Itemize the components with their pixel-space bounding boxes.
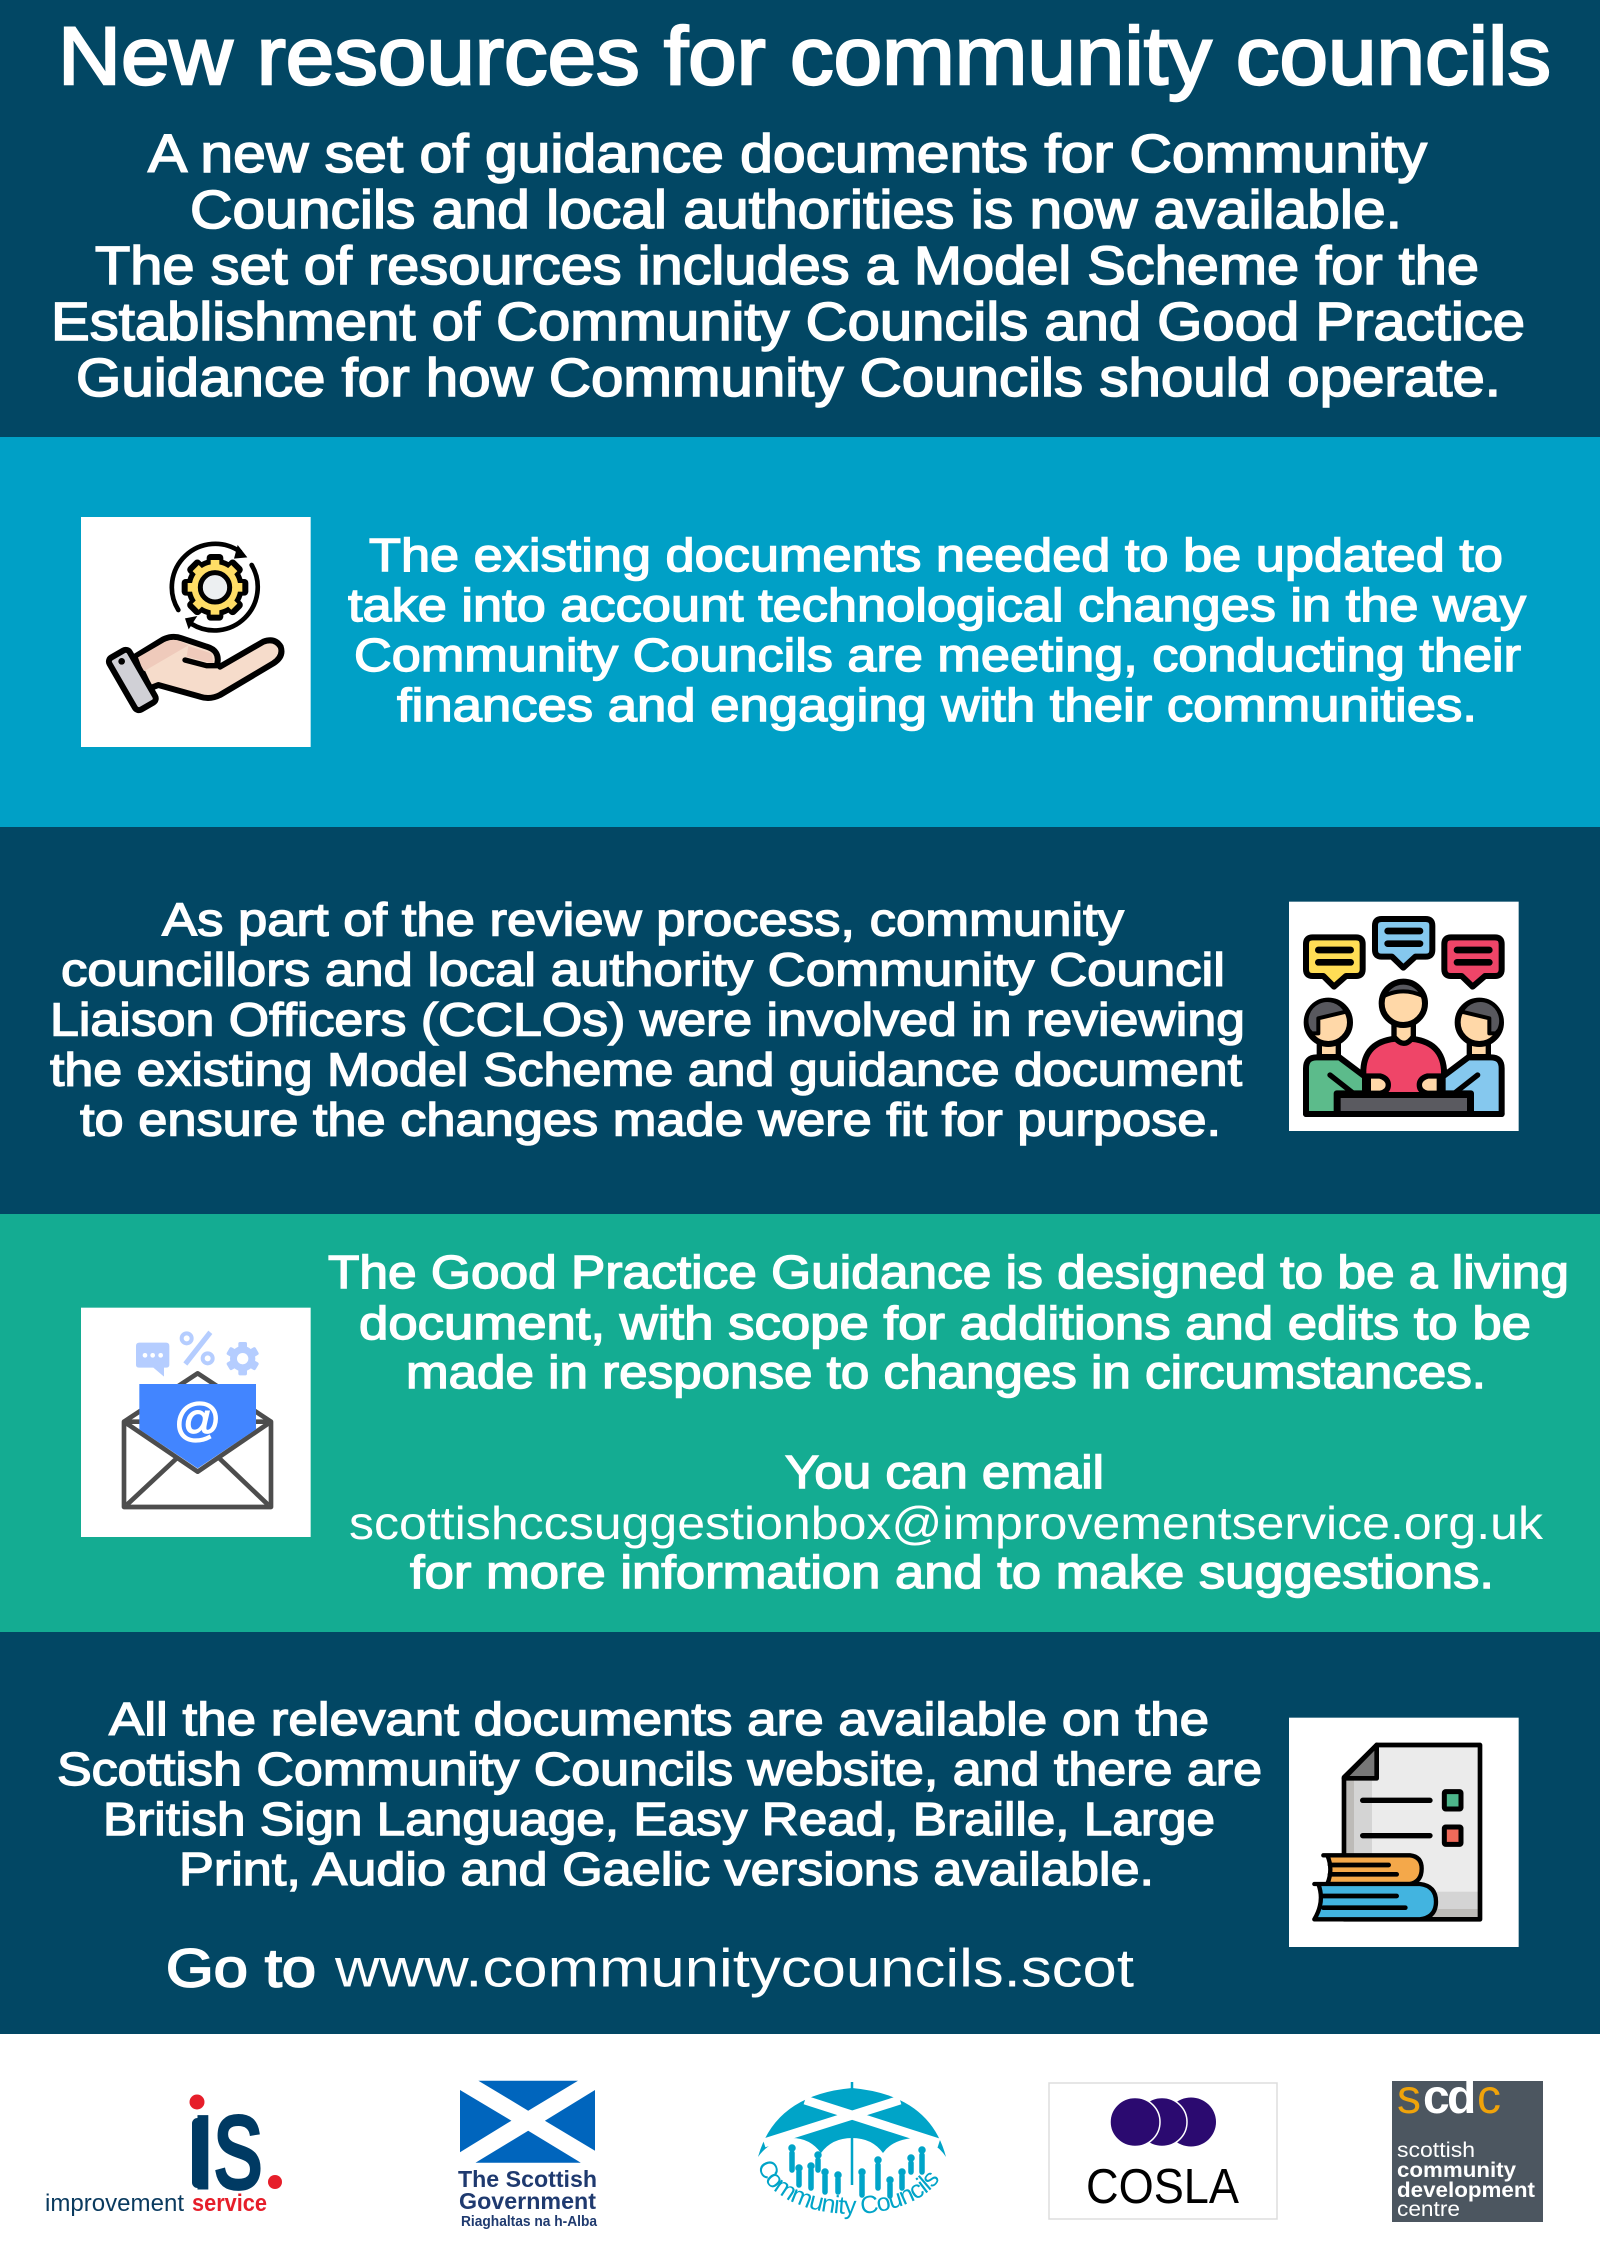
- logo: improvement service: is: [192, 2066, 263, 2217]
- intro text block: Guidance for how Community Councils should operate.: [76, 349, 1501, 408]
- website link: Go to: [166, 1938, 316, 1998]
- text block: why updated: [348, 529, 1527, 731]
- logo: the scottish government: Riaghaltas na h-Alba: [461, 2213, 598, 2230]
- logo: scottish community development centre: c: [1477, 2071, 1501, 2124]
- panel: partner logos: [45, 2066, 1543, 2230]
- text block: why updated: finances and engaging with their communities.: [397, 679, 1477, 731]
- text block: availability: Scottish Community Councils website, and there are: [57, 1743, 1262, 1795]
- title: New resources for community councils: [58, 11, 1551, 102]
- intro text block: Establishment of Community Councils and Good Practice: [51, 293, 1525, 352]
- text block: availability: All the relevant documents are available on the: [109, 1693, 1209, 1745]
- text block: review process: the existing Model Scheme and guidance document: [50, 1044, 1242, 1096]
- text block: living document: The Good Practice Guidance is designed to be a living: [328, 1246, 1569, 1298]
- text block: living document: [328, 1246, 1569, 1398]
- text block: review process: [50, 894, 1245, 1146]
- text block: living document: document, with scope for additions and edits to be: [359, 1297, 1531, 1349]
- icon: hand holding gear: [81, 517, 311, 747]
- panel: good practice guidance: [0, 1214, 1600, 1632]
- logo: cosla: [1049, 2083, 1277, 2219]
- text block: why updated: take into account technological changes in the way: [348, 579, 1527, 631]
- logo: improvement service: service: [192, 2190, 267, 2217]
- logo: improvement service: [45, 2066, 282, 2217]
- text block: email contact: [349, 1446, 1544, 1598]
- icon: document and books: [1289, 1718, 1519, 1947]
- icon: open envelope with at sign: [81, 1308, 311, 1537]
- intro text block: [51, 125, 1525, 408]
- text block: email contact: scottishccsuggestionbox@improvementservice.org.uk: [349, 1497, 1544, 1549]
- logo: scottish community development centre: development: [1397, 2179, 1535, 2202]
- text block: review process: As part of the review process, community: [162, 894, 1125, 946]
- panel: why documents were updated: [0, 437, 1600, 827]
- text block: email contact: You can email: [785, 1446, 1104, 1498]
- logo: the scottish government: [458, 2081, 598, 2230]
- logo: improvement service: improvement: [45, 2190, 184, 2217]
- logo: the scottish government: The Scottish: [458, 2166, 597, 2192]
- logo: scottish community development centre: [1392, 2071, 1543, 2222]
- text block: availability: Print, Audio and Gaelic versions available.: [179, 1843, 1154, 1895]
- text block: availability: [57, 1693, 1262, 1895]
- text block: living document: made in response to changes in circumstances.: [406, 1346, 1486, 1398]
- text block: availability: British Sign Language, Easy Read, Braille, Large: [103, 1793, 1215, 1845]
- logo: scottish community development centre: s: [1397, 2071, 1421, 2124]
- logo: the scottish government: Government: [459, 2188, 596, 2214]
- icon: open envelope with at sign: @: [174, 1394, 221, 1446]
- intro text block: Councils and local authorities is now available.: [190, 181, 1402, 240]
- text block: review process: to ensure the changes made were fit for purpose.: [80, 1094, 1221, 1146]
- text block: email contact: for more information and to make suggestions.: [410, 1546, 1494, 1598]
- text block: why updated: Community Councils are meeting, conducting their: [354, 629, 1521, 681]
- text block: review process: councillors and local authority Community Council: [61, 944, 1225, 996]
- logo: community councils: Community Councils: [760, 2161, 938, 2220]
- logo: scottish community development centre: d: [1447, 2071, 1476, 2124]
- panel: where to find documents: [0, 1632, 1600, 2034]
- intro text block: A new set of guidance documents for Community: [148, 125, 1427, 184]
- logo: scottish community development centre: c: [1423, 2071, 1450, 2124]
- logo: cosla: COSLA: [1086, 2160, 1239, 2214]
- icon: people in discussion: [1289, 902, 1519, 1131]
- logo: community councils: [758, 2082, 946, 2220]
- panel: review process: [0, 827, 1600, 1214]
- logo: scottish community development centre: community: [1397, 2159, 1516, 2182]
- website link: www.communitycouncils.scot: [334, 1938, 1134, 1998]
- logo: scottish community development centre: scottish: [1397, 2139, 1475, 2162]
- panel: introduction header: [0, 0, 1600, 437]
- logo: scottish community development centre: centre: [1397, 2198, 1460, 2221]
- intro text block: The set of resources includes a Model Scheme for the: [95, 237, 1479, 296]
- text block: why updated: The existing documents needed to be updated to: [369, 529, 1503, 581]
- text block: review process: Liaison Officers (CCLOs) were involved in reviewing: [50, 994, 1245, 1046]
